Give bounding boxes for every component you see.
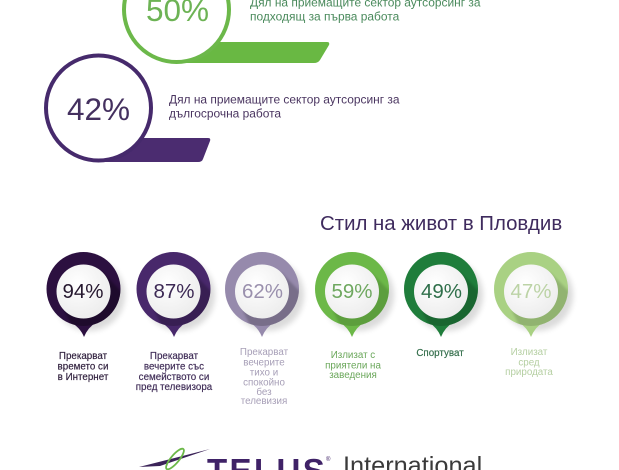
value: 47%	[510, 280, 552, 303]
marker	[494, 252, 575, 337]
caption: Излизат	[511, 347, 548, 358]
caption: времето си	[58, 362, 108, 372]
ring: 50%	[124, 0, 229, 62]
caption: Спортуват	[416, 348, 464, 359]
description: long-term job: Дял на приемащите сектор аутсорсинг за	[169, 92, 400, 106]
caption: Прекарват	[150, 351, 199, 362]
ring: 42%	[46, 56, 151, 160]
bar: green	[176, 42, 329, 63]
marker	[315, 252, 396, 337]
caption: вечерите със	[144, 362, 204, 372]
caption: Прекарват	[59, 351, 108, 362]
description: long-term job: дългосрочна работа	[169, 106, 281, 120]
heading: lifestyle: Стил на живот в Пловдив	[320, 213, 562, 235]
value: 42%: 42%	[67, 91, 130, 127]
caption: заведения	[329, 370, 377, 381]
caption: вечерите	[243, 358, 285, 368]
caption: приятели на	[325, 360, 381, 372]
caption: Прекарват	[240, 347, 289, 358]
caption: пред телевизора	[136, 382, 213, 393]
marker	[136, 252, 217, 337]
marker	[404, 252, 485, 337]
caption: семейството си	[139, 372, 209, 383]
pin: 49%	[404, 252, 485, 358]
pin: 62%	[225, 252, 306, 404]
logo: TELUS International	[139, 446, 482, 470]
value: 94%	[62, 280, 104, 303]
value: 87%	[153, 280, 195, 303]
caption: сред	[518, 358, 540, 368]
pin: 59%	[315, 252, 396, 380]
marker	[225, 252, 306, 337]
value: 49%	[421, 280, 462, 303]
stat: 42% long-term job	[46, 56, 400, 162]
caption: тихо и	[250, 368, 278, 378]
bar: purple	[98, 138, 210, 162]
caption: без	[256, 387, 272, 398]
caption: телевизия	[241, 396, 287, 407]
registered mark: ®	[326, 456, 331, 463]
description: first job: подходящ за първа работа	[250, 10, 400, 24]
stat: 50% first job	[124, 0, 481, 63]
logo mark	[139, 446, 210, 470]
caption: Излизат с	[331, 350, 375, 361]
marker	[46, 252, 127, 337]
caption: спокойно	[243, 378, 285, 388]
pin: 47%	[494, 252, 575, 377]
pin: 94%	[46, 252, 127, 382]
value: 59%	[331, 280, 373, 303]
value: 62%	[242, 280, 283, 303]
pin: 87%	[136, 252, 217, 392]
caption: в Интернет	[58, 372, 109, 383]
caption: природата	[505, 367, 553, 378]
